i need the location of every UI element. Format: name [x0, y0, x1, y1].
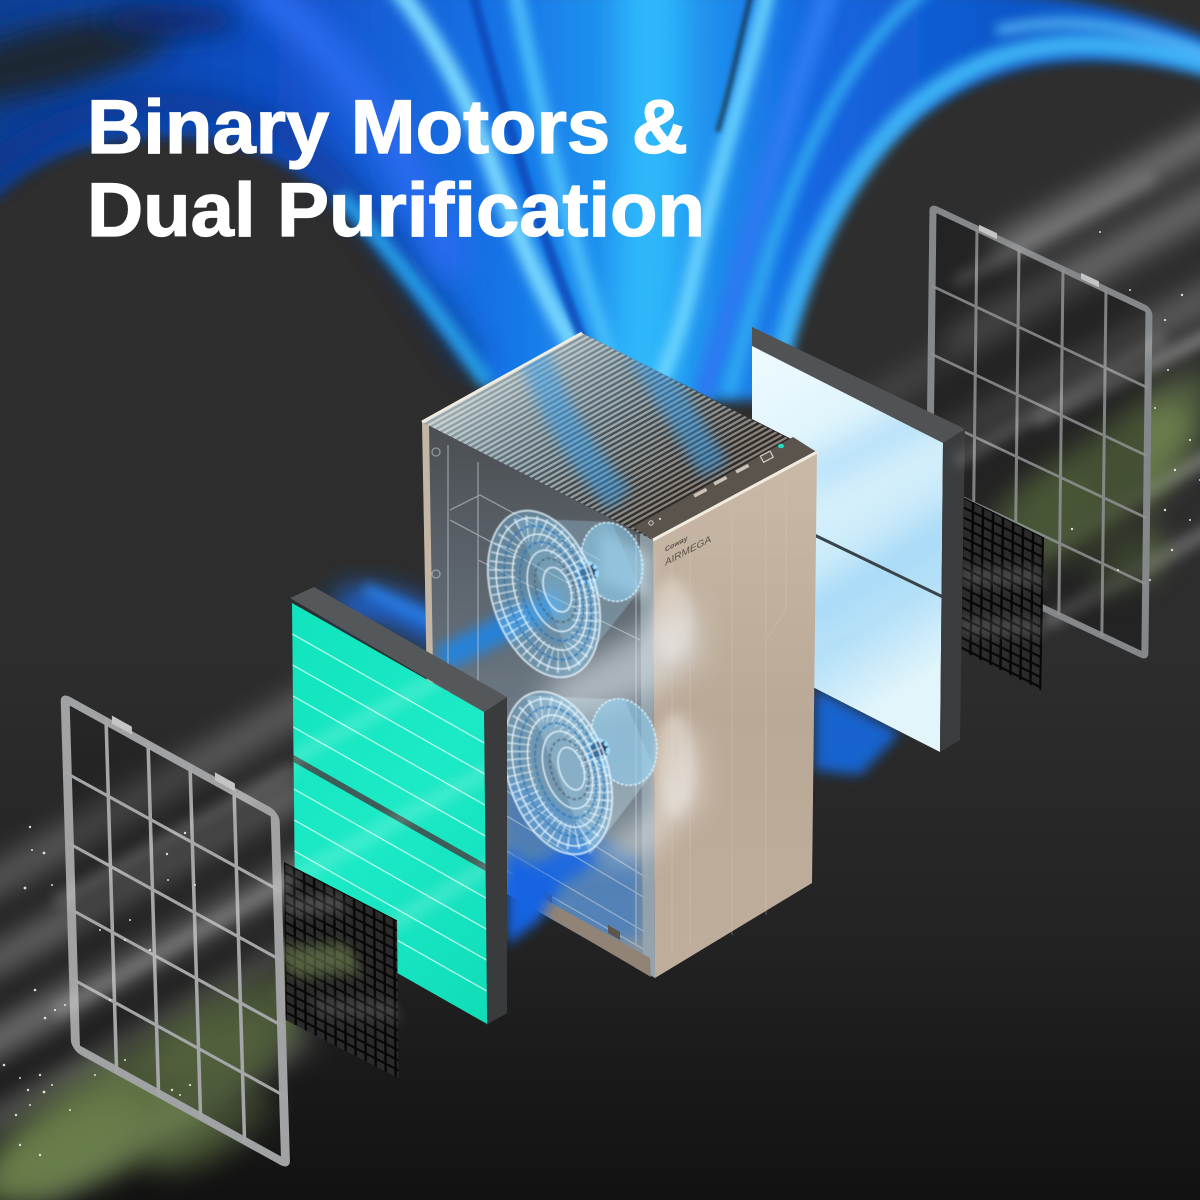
air glow on fins [424, 333, 790, 540]
right carbon filter [960, 497, 1044, 690]
base strip [537, 895, 651, 977]
filter split [752, 505, 943, 597]
rear cylinder [573, 516, 651, 608]
dark patch top left [0, 0, 179, 119]
wire cage [468, 496, 620, 692]
brand text: Coway [665, 533, 688, 554]
dust particles [3, 231, 1200, 1156]
green dust cloud [0, 358, 1200, 1200]
upper fan [468, 496, 651, 692]
fins on top [424, 333, 817, 540]
right white HEPA filter [752, 327, 965, 752]
purifier unit [400, 320, 830, 978]
left green HEPA filter [290, 587, 507, 1025]
left carbon filter [284, 862, 399, 1078]
interior structure [432, 445, 650, 950]
pleat lines [292, 634, 487, 991]
base notches [540, 887, 620, 940]
clips [979, 225, 1099, 287]
filter split [294, 755, 486, 871]
control panel strip [633, 437, 815, 540]
frame glass [65, 699, 286, 1163]
beige right face [653, 452, 817, 978]
blue glow below left filter [507, 850, 560, 945]
left mesh pre-filter [62, 688, 289, 1168]
wire cage [484, 678, 632, 868]
frame glass [929, 208, 1149, 656]
top edge [752, 327, 965, 443]
clips [112, 716, 235, 791]
light on mesh [284, 872, 344, 938]
transparent interior [422, 422, 655, 978]
cage lattice [495, 687, 625, 858]
side edge [484, 697, 507, 1025]
grid lines [62, 694, 289, 1168]
light on mesh [961, 537, 1042, 667]
grid lines [929, 208, 1149, 656]
title: Binary Motors & [87, 85, 688, 170]
side light strip [640, 533, 655, 978]
rear cylinder [582, 691, 666, 793]
outer left arc [0, 102, 470, 360]
title: Dual Purification [87, 168, 705, 253]
blue airflow fountain [0, 0, 1200, 400]
title [87, 85, 705, 253]
left edge strip [422, 422, 436, 850]
fan air glow [540, 530, 700, 860]
blue glow below right filter [815, 688, 900, 775]
base colour field [0, 0, 1200, 400]
air light on face [294, 676, 486, 934]
cage lattice [478, 505, 614, 682]
green face [292, 603, 487, 1024]
right mesh pre-filter [929, 203, 1149, 656]
streams [260, 0, 450, 260]
air light on face [808, 410, 942, 630]
lower fan [484, 678, 666, 868]
indicator light [778, 444, 784, 448]
hub [577, 563, 597, 583]
internal ghost lines [672, 480, 786, 955]
taper body [515, 518, 640, 672]
streak overlay on mesh [60, 180, 1160, 1010]
right arc [782, 45, 1200, 350]
rim highlight [422, 333, 817, 540]
brand text: AIRMEGA [665, 533, 712, 569]
panel icons [649, 451, 773, 525]
top edge [290, 587, 507, 712]
hub [588, 740, 608, 760]
side edge [940, 429, 965, 752]
blue airflow through the purifier [350, 590, 480, 655]
taper body [525, 695, 655, 855]
interior blue light [432, 445, 650, 950]
white face [752, 346, 943, 752]
